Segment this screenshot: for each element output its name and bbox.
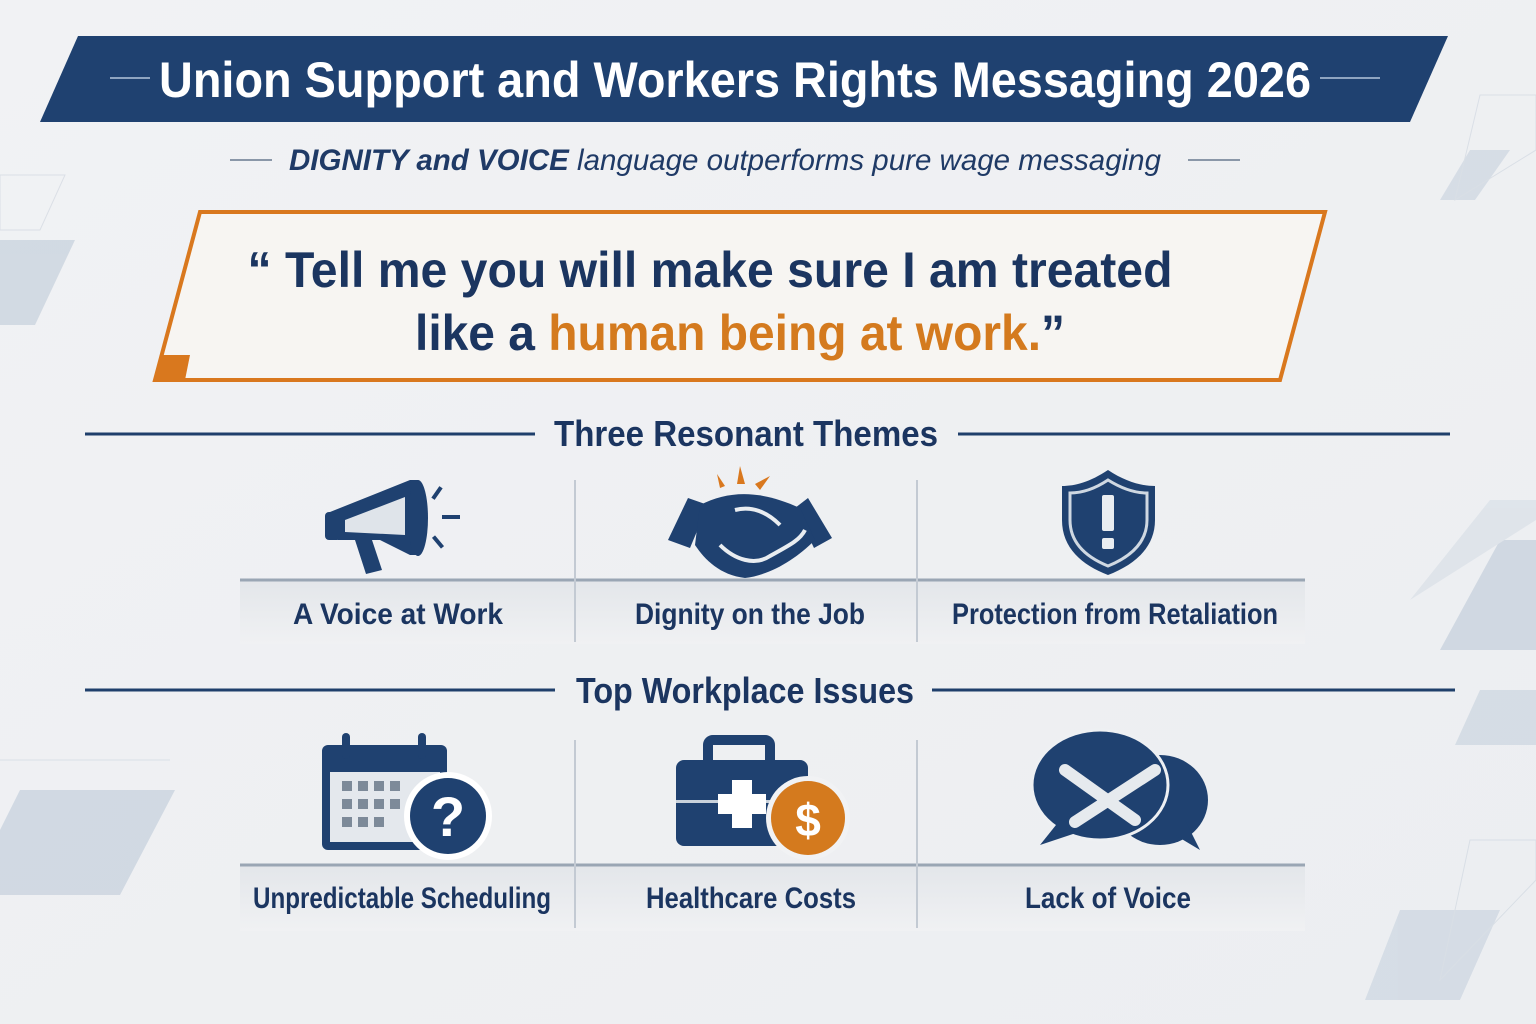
bands [240, 580, 1305, 644]
icon: calendar: ? [431, 785, 465, 848]
icon: speech bubbles with X [1032, 730, 1208, 850]
icon: shield [1062, 470, 1155, 575]
icon: medical kit with dollar [676, 740, 850, 860]
label: A Voice at Work: A Voice at Work [293, 598, 503, 631]
title banner [40, 36, 1448, 122]
heading: top issues: Top Workplace Issues [576, 670, 914, 711]
label: Dignity on the Job: Dignity on the Job [635, 598, 865, 631]
heading: three themes: Three Resonant Themes [554, 413, 938, 454]
label: Protection from Retaliation: Protection from Retaliation [952, 598, 1278, 631]
subtitle: DIGNITY and VOICE language outperforms pure wage messaging [289, 144, 1161, 177]
label: Lack of Voice: Lack of Voice [1025, 882, 1191, 915]
icon: handshake [668, 466, 832, 578]
label: Unpredictable Scheduling: Unpredictable Scheduling [253, 882, 551, 915]
icon: megaphone [325, 480, 460, 574]
icon: calendar [322, 733, 492, 860]
icon: medical kit with dollar: $ [795, 794, 821, 846]
label: Healthcare Costs: Healthcare Costs [646, 882, 856, 915]
quote box [155, 212, 1325, 382]
quote box: like a human being at work.” [415, 305, 1065, 361]
quote box: “ Tell me you will make sure I am treated [248, 242, 1172, 298]
title banner: Union Support and Workers Rights Messaging 2026 [159, 52, 1311, 108]
